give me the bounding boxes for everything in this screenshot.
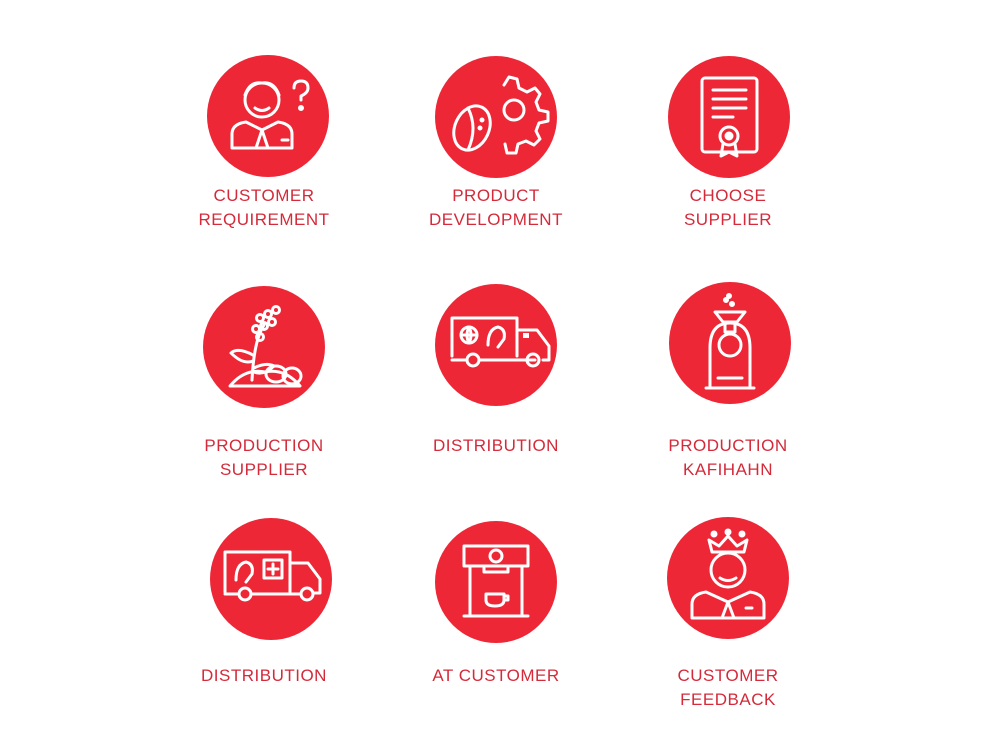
icon: customer requirement [207,55,329,177]
label: production supplier [204,436,324,479]
label: product development: DEVELOPMENT [429,210,563,229]
label: customer feedback: FEEDBACK [680,690,776,709]
label: production kafihahn: KAFIHAHN [683,460,773,479]
label: product development: PRODUCT [452,186,540,205]
label: production supplier: PRODUCTION [204,436,324,455]
label: choose supplier: CHOOSE [690,186,766,205]
icon: distribution 1 [435,284,557,406]
label: customer feedback [678,666,778,709]
label: production kafihahn [668,436,788,479]
label: production supplier: SUPPLIER [220,460,308,479]
label: distribution: DISTRIBUTION [433,436,559,455]
label: production kafihahn: PRODUCTION [668,436,788,455]
label: product development [429,186,563,229]
label: distribution 2: DISTRIBUTION [201,666,327,685]
icon: customer feedback [667,517,789,639]
label: customer requirement [198,186,330,229]
label: customer feedback: CUSTOMER [678,666,778,685]
label: choose supplier [684,186,772,229]
icon: production kafihahn [669,282,791,404]
icon: distribution 2 [210,518,332,640]
icon: at customer [435,521,557,643]
icon: production supplier [203,286,325,408]
label: customer requirement: REQUIREMENT [198,210,330,229]
label: choose supplier: SUPPLIER [684,210,772,229]
label: customer requirement: CUSTOMER [214,186,314,205]
icon: choose supplier [668,56,790,178]
label: at customer: AT CUSTOMER [432,666,560,685]
icon: product development [435,56,557,178]
